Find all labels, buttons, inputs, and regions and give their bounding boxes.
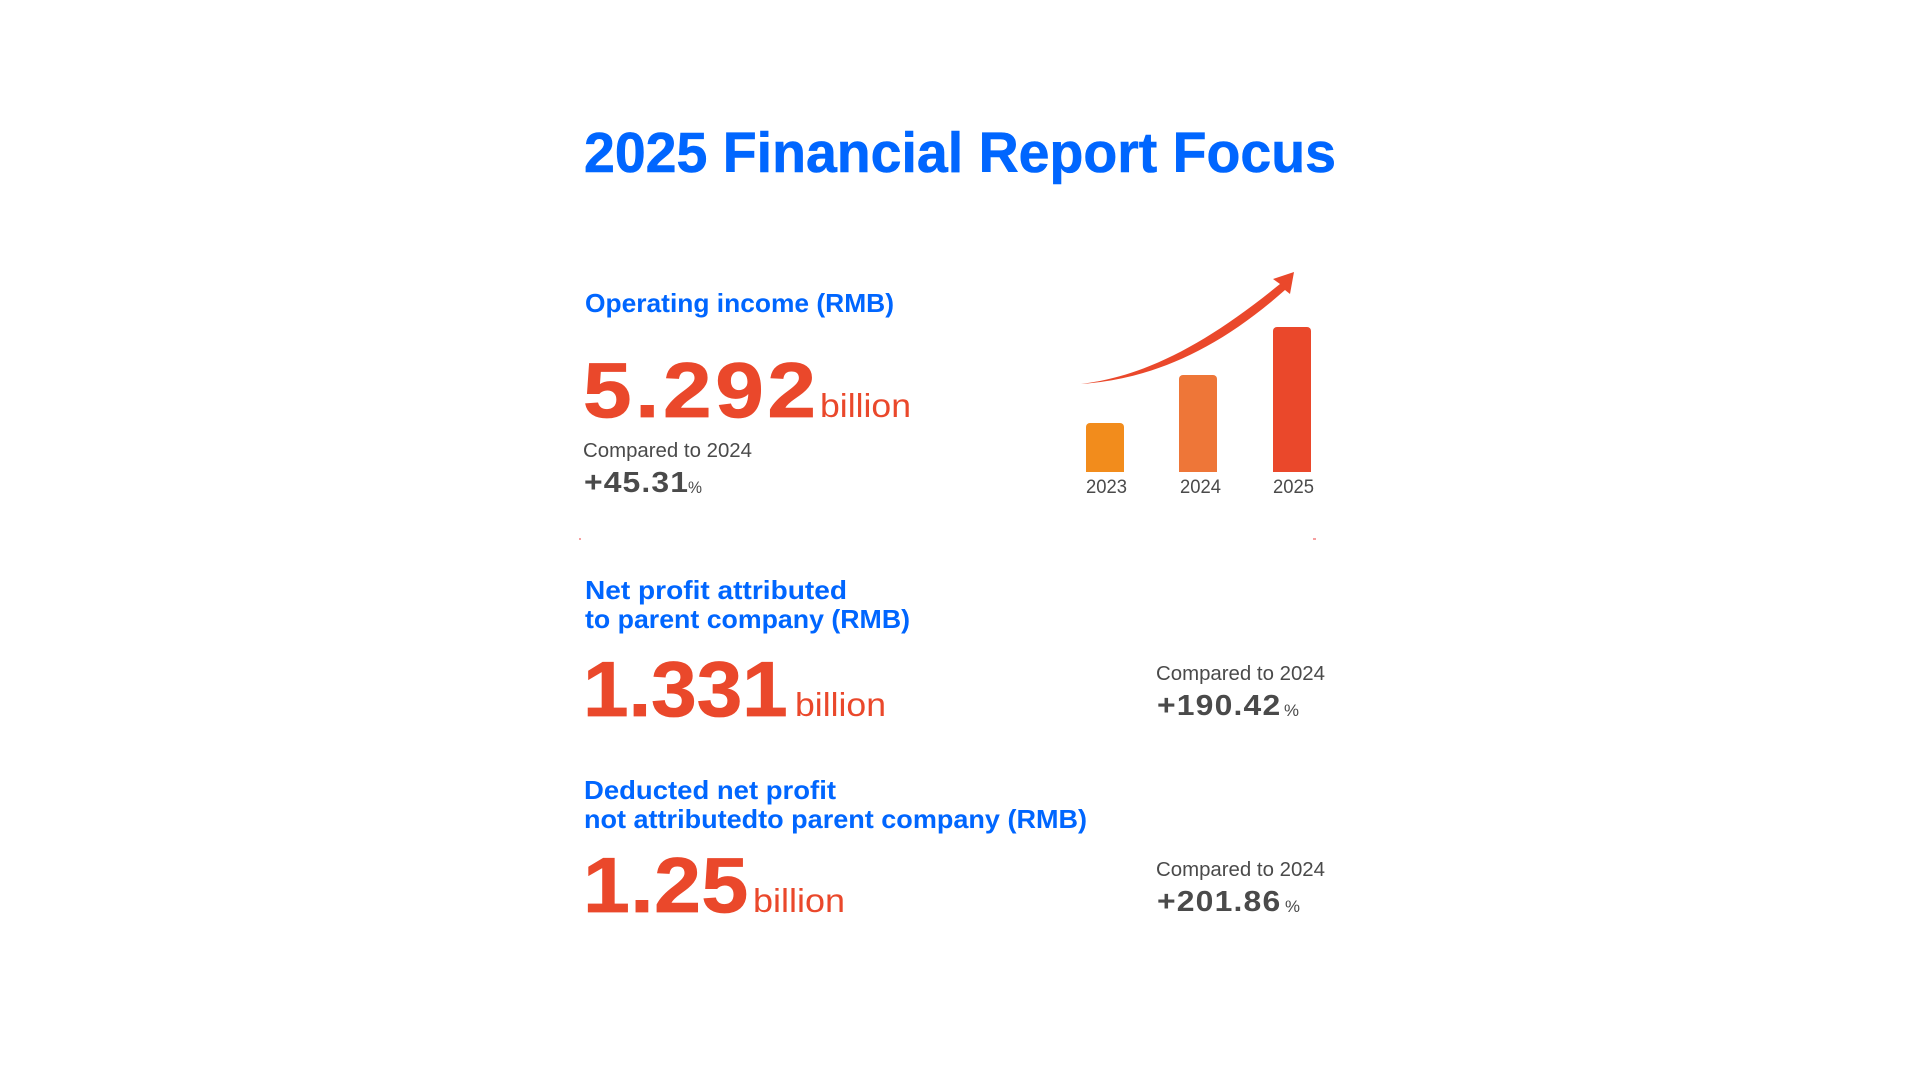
icon: rising arrow xyxy=(1081,272,1294,384)
comparison: +201.86%: Compared to 2024 xyxy=(1156,859,1325,881)
comparison: +201.86%: +201.86 xyxy=(1157,885,1280,918)
heading: deducted net profit: Deducted net profit xyxy=(584,775,836,805)
label: 2024: 2024 xyxy=(1180,477,1221,498)
value: 1.331 billion: billion xyxy=(795,686,886,723)
heading: net profit: Net profit attributed xyxy=(585,575,847,605)
heading: deducted net profit: not attributedto parent company (RMB) xyxy=(584,804,1087,834)
title: 2025 Financial Report Focus xyxy=(584,121,1336,185)
comparison: +45.31%: % xyxy=(688,478,702,497)
comparison: +201.86%: % xyxy=(1285,897,1300,916)
heading: operating income: Operating income (RMB) xyxy=(585,288,894,318)
panel: deducted net profit xyxy=(583,775,1325,929)
comparison: +190.42% xyxy=(1156,663,1325,722)
bar chart: revenue by year xyxy=(1081,272,1314,498)
bar: 2025 xyxy=(1273,327,1311,472)
panel: net profit attributed to parent company xyxy=(583,575,1325,733)
comparison: +190.42%: +190.42 xyxy=(1157,689,1280,722)
comparison: +45.31%: Compared to 2024 xyxy=(583,440,752,462)
bar: 2024 xyxy=(1179,375,1217,472)
label: 2023: 2023 xyxy=(1086,477,1127,498)
value: 1.25 billion: billion xyxy=(753,882,845,919)
comparison: +201.86% xyxy=(1156,859,1325,918)
comparison: +45.31%: +45.31 xyxy=(584,466,688,499)
value: 1.25 billion: 1.25 xyxy=(583,843,748,929)
value: 1.331 billion: 1.331 xyxy=(583,646,788,733)
value: 5.292 billion: 5.292 xyxy=(583,346,816,434)
value: 5.292 billion: billion xyxy=(820,387,911,424)
value: 1.25 billion xyxy=(583,843,845,929)
value: 1.331 billion xyxy=(583,646,886,733)
comparison: +190.42%: % xyxy=(1284,701,1299,720)
bar: 2023 xyxy=(1086,423,1124,472)
panel: operating income xyxy=(583,288,911,499)
comparison: +190.42%: Compared to 2024 xyxy=(1156,663,1325,685)
heading: deducted net profit xyxy=(584,775,1087,834)
heading: net profit xyxy=(585,575,910,634)
label: 2025: 2025 xyxy=(1273,477,1314,498)
comparison: +45.31% xyxy=(583,440,752,499)
heading: net profit: to parent company (RMB) xyxy=(585,604,910,634)
